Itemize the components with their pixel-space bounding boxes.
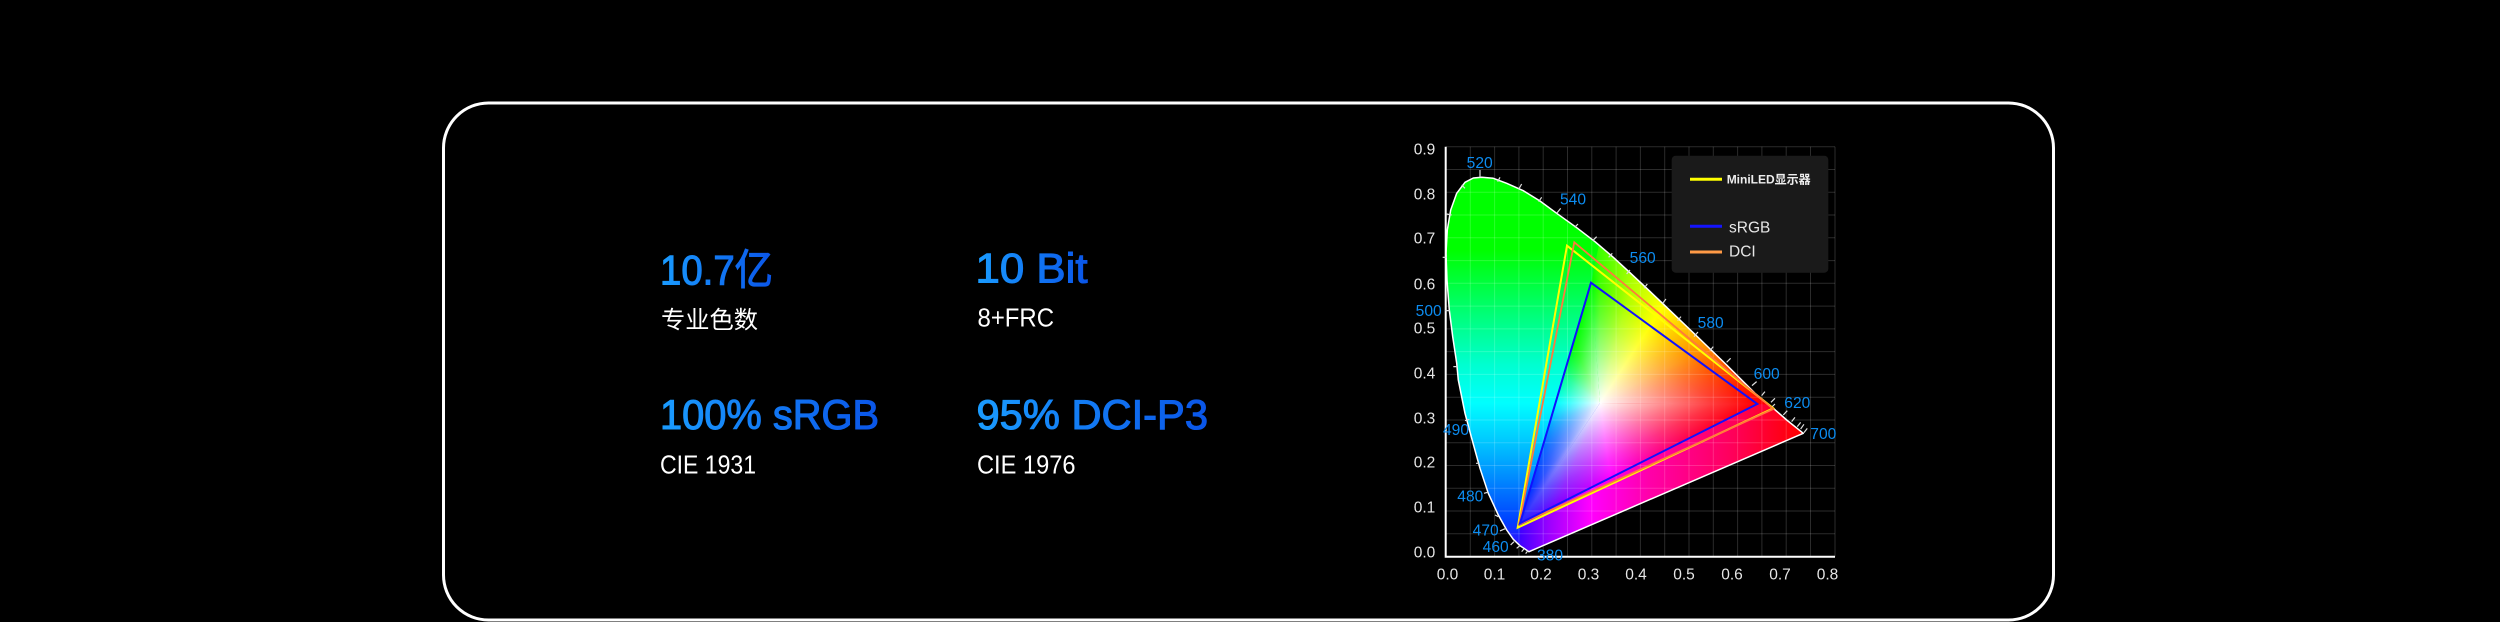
wavelength labels: 600 [1754, 366, 1780, 383]
x axis labels [1437, 566, 1838, 584]
stat: 100% sRGB CIE 1931: CIE 1931 [660, 451, 756, 479]
y axis labels: 0.1 [1414, 500, 1435, 516]
stat: 95% DCI-P3 CIE 1976 [976, 391, 1208, 479]
wavelength labels [1416, 155, 1837, 564]
stat: 10.7亿 专业色数 [660, 246, 773, 334]
wavelength labels: 520 [1467, 155, 1493, 172]
stat: 10.7亿 专业色数: 专业色数 [661, 307, 758, 334]
chart legend: MiniLED显示器 [1727, 172, 1811, 186]
gamut triangle: DCI orange [1519, 242, 1773, 525]
wavelength labels: 540 [1560, 192, 1586, 208]
x axis labels: 0.6 [1721, 566, 1743, 584]
infographic stage [442, 102, 2055, 622]
y axis labels: 0.7 [1414, 230, 1435, 248]
wavelength ticks [1443, 170, 1807, 554]
chart legend [1672, 156, 1828, 273]
y axis labels: 0.5 [1414, 320, 1435, 338]
y axis labels: 0.8 [1414, 186, 1435, 204]
chart legend: sRGB [1729, 220, 1770, 236]
wavelength labels: 480 [1457, 488, 1484, 506]
stat: 95% DCI-P3 CIE 1976: CIE 1976 [977, 451, 1076, 479]
y axis labels: 0.0 [1414, 544, 1436, 562]
stat: 10 Bit 8+FRC: 10 Bit [976, 245, 1088, 292]
white point blend inside sRGB triangle [1520, 283, 1757, 523]
spectral locus outline [1446, 177, 1803, 552]
stat: 10 Bit 8+FRC [976, 245, 1088, 333]
gamut triangle: MiniLED yellow [1518, 246, 1773, 528]
wavelength labels: 500 [1416, 303, 1442, 320]
overlay graphics [442, 102, 2055, 622]
wavelength labels: 460 [1483, 539, 1509, 556]
stat: 10.7亿 专业色数: 10.7亿 [660, 246, 773, 293]
gamut triangle: sRGB blue [1520, 283, 1757, 523]
wavelength labels: 470 [1473, 522, 1499, 540]
chart grid [1446, 147, 1835, 557]
x axis labels: 0.8 [1817, 566, 1838, 584]
wavelength labels: 560 [1630, 250, 1656, 267]
wavelength labels: 620 [1784, 395, 1811, 412]
rounded panel frame [444, 103, 2054, 620]
wavelength labels: 380 [1537, 548, 1563, 564]
gamut colour regions outside sRGB triangle [1440, 170, 1815, 560]
y axis labels: 0.9 [1414, 142, 1435, 158]
y axis labels [1414, 142, 1436, 562]
stat: 95% DCI-P3 CIE 1976: 95% DCI-P3 [976, 391, 1208, 438]
wavelength labels: 580 [1698, 315, 1724, 332]
x axis labels: 0.3 [1578, 566, 1599, 584]
chart legend: DCI [1729, 244, 1756, 260]
stat: 100% sRGB CIE 1931: 100% sRGB [660, 391, 879, 438]
y axis labels: 0.3 [1414, 410, 1435, 428]
x axis labels: 0.5 [1673, 566, 1695, 584]
y axis labels: 0.6 [1414, 276, 1435, 294]
wavelength labels: 490 [1443, 422, 1469, 439]
x axis labels: 0.7 [1769, 566, 1791, 584]
chromaticity diagram colour fill [1522, 246, 1767, 522]
y axis labels: 0.4 [1414, 366, 1436, 382]
wavelength labels: 700 [1810, 426, 1837, 443]
x axis labels: 0.4 [1625, 566, 1647, 584]
chart axes [1446, 147, 1835, 557]
x axis labels: 0.0 [1437, 566, 1459, 584]
x axis labels: 0.1 [1484, 566, 1505, 584]
x axis labels: 0.2 [1530, 566, 1552, 584]
y axis labels: 0.2 [1414, 454, 1435, 472]
stat: 100% sRGB CIE 1931 [660, 391, 879, 479]
stat: 10 Bit 8+FRC: 8+FRC [978, 305, 1054, 333]
